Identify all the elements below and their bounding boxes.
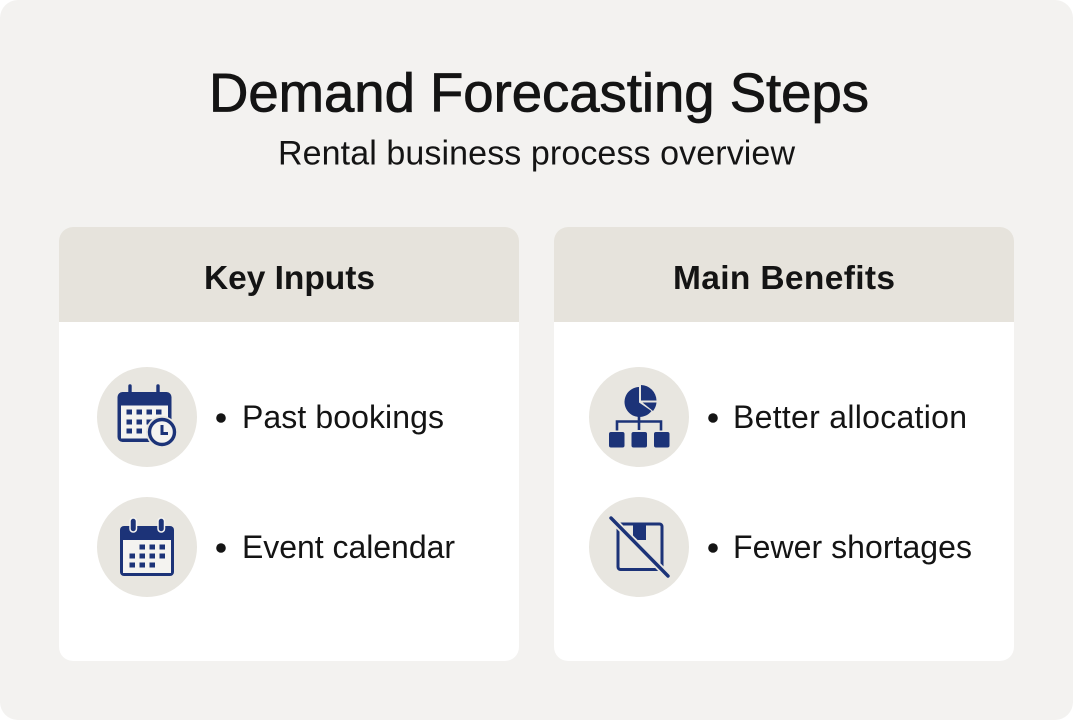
title: Demand Forecasting Steps: [209, 62, 869, 124]
heading: key inputs: Key Inputs: [204, 260, 375, 297]
text: fewer shortages: Fewer shortages: [733, 529, 972, 565]
text: past bookings: Past bookings: [242, 399, 444, 435]
panel: main benefits: [554, 227, 1014, 661]
panel header: [554, 227, 1014, 322]
bullet: event calendar: [216, 543, 226, 553]
text: better allocation: Better allocation: [733, 399, 967, 435]
text: event calendar: Event calendar: [242, 529, 455, 565]
panel: key inputs: [59, 227, 519, 661]
bullet: fewer shortages: [708, 543, 718, 553]
bullet: better allocation: [708, 413, 718, 423]
heading: main benefits: Main Benefits: [673, 260, 895, 297]
icon: pie chart and hierarchy: [589, 367, 689, 467]
subtitle: Rental business process overview: [278, 134, 795, 172]
icon: crossed-out box: [589, 497, 689, 597]
icon: calendar with clock: [97, 367, 197, 467]
panel header: [59, 227, 519, 322]
bullet: past bookings: [216, 413, 226, 423]
icon: event calendar: [97, 497, 197, 597]
panel body: [59, 227, 519, 661]
panel body: [554, 227, 1014, 661]
